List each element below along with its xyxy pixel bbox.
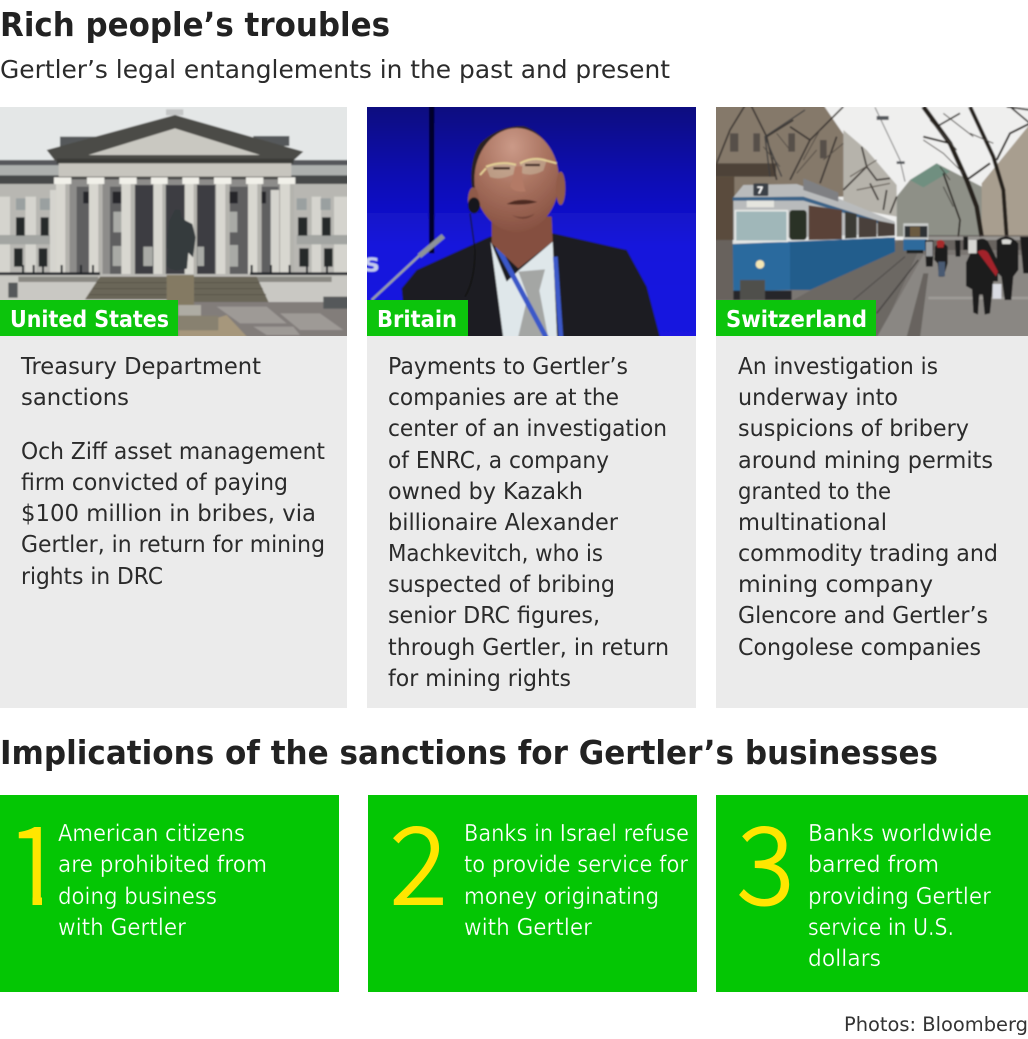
text: implication 2: to provide service for [464, 850, 688, 878]
panel: implication 3 [716, 780, 1028, 992]
text: implication 3 [808, 819, 992, 972]
text: Switzerland details: An investigation is [738, 352, 938, 380]
label: Britain [367, 300, 468, 336]
card background [367, 336, 696, 708]
text: Britain details: through Gertler, in return [388, 633, 669, 661]
text: implication 3: providing Gertler [808, 882, 991, 910]
text: implication 1: with Gertler [58, 913, 186, 941]
label: United States [0, 300, 178, 336]
photo: Zurich tram street [716, 107, 1028, 336]
text: implication 2: money originating [464, 882, 659, 910]
text: United States details: sanctions [21, 383, 129, 411]
number 3: 3 [737, 780, 794, 935]
text: United States details: Gertler, in return for mining [21, 530, 325, 558]
subtitle: Gertler’s legal entanglements in the past and present [0, 55, 670, 84]
panel: Switzerland [710, 100, 1028, 708]
text: United States details: Treasury Department [20, 352, 261, 380]
title: Rich people’s troubles [0, 5, 390, 44]
text: Switzerland details: multinational [738, 508, 887, 536]
label: Switzerland [716, 300, 876, 336]
panel: implication 1 [0, 780, 339, 992]
text: Britain details: senior DRC figures, [388, 601, 600, 629]
photo: man at a conference: s [364, 249, 379, 279]
text: Britain details: companies are at the [388, 383, 619, 411]
text: Britain details: Payments to Gertler’s [388, 352, 628, 380]
panel: implication 2 [368, 780, 697, 992]
text: Switzerland details: Glencore and Gertler’s [738, 601, 988, 629]
text: Switzerland details: commodity trading and [738, 539, 998, 567]
text: implication 1 [58, 819, 267, 941]
text: implication 1: American citizens [58, 819, 245, 847]
text: Switzerland details: underway into [738, 383, 898, 411]
text: implication 3: Banks worldwide [808, 819, 992, 847]
photo: man at a conference [364, 107, 696, 336]
card background [0, 336, 347, 708]
panel: Britain [360, 100, 703, 708]
text: Britain details: center of an investigation [388, 414, 667, 442]
text: Britain details: of ENRC, a company [388, 446, 609, 474]
text: Britain details: for mining rights [388, 664, 571, 692]
label: Switzerland: Switzerland [726, 307, 867, 333]
text: implication 1: are prohibited from [58, 850, 267, 878]
text: Switzerland details: mining company [738, 570, 933, 598]
label: Britain: Britain [377, 307, 457, 333]
panel: United States [0, 103, 350, 708]
text: implication 1: doing business [58, 882, 217, 910]
label: United States: United States [10, 307, 169, 333]
text: United States details: Och Ziff asset management [21, 437, 325, 465]
text: United States details: firm convicted of paying [21, 468, 288, 496]
number 2: 2 [390, 780, 447, 935]
text: implication 2: with Gertler [464, 913, 592, 941]
text: United States details: rights in DRC [21, 562, 163, 590]
text: implication 3: service in U.S. [808, 913, 954, 941]
text: Switzerland details: granted to the [738, 477, 891, 505]
text: implication 3: barred from [808, 850, 939, 878]
text: Britain details: Machkevitch, who is [388, 539, 603, 567]
text: United States details: $100 million in bribes, via [21, 499, 316, 527]
text: implication 2: Banks in Israel refuse [464, 819, 689, 847]
text: Britain details [388, 352, 669, 692]
text: implication 3: dollars [808, 944, 881, 972]
photo: Treasury building [0, 107, 347, 336]
credit: Photos: Bloomberg [844, 1013, 1028, 1036]
text: Britain details: owned by Kazakh [388, 477, 583, 505]
text: Switzerland details: suspicions of bribery [738, 414, 969, 442]
text: Britain details: billionaire Alexander [388, 508, 618, 536]
number 1: 1 [6, 780, 63, 935]
text: Switzerland details: Congolese companies [738, 633, 981, 661]
card background [716, 336, 1028, 708]
text: United States details [20, 352, 325, 590]
text: Britain details: suspected of bribing [388, 570, 615, 598]
text: Switzerland details: around mining permits [738, 446, 993, 474]
text: implication 2 [464, 819, 689, 941]
heading: implications: Implications of the sanctions for Gertler’s businesses [0, 733, 938, 772]
text: Switzerland details [738, 352, 998, 661]
photo: Zurich tram street: 7 [757, 186, 764, 197]
